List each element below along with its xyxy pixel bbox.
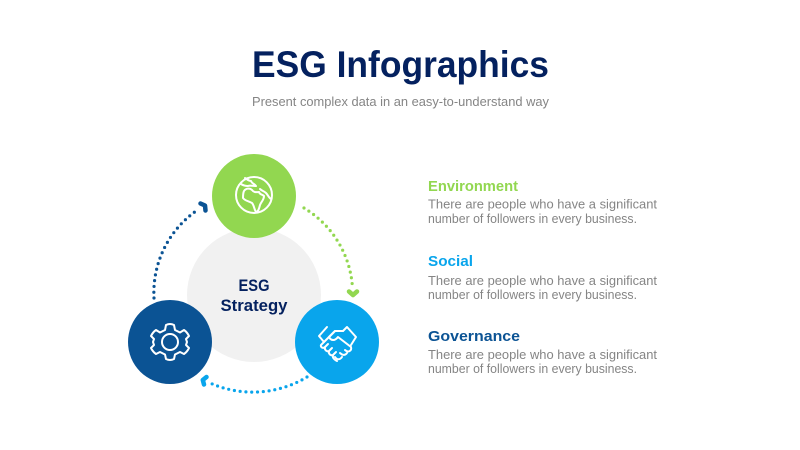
text block: governance: number of followers in every business.	[428, 362, 637, 376]
text block: environment: number of followers in every business.	[428, 212, 637, 226]
text block: social: number of followers in every business.	[428, 288, 637, 302]
environment node	[212, 154, 296, 238]
text block: governance: There are people who have a significant	[428, 348, 658, 362]
arrow: governance to environment	[154, 204, 206, 298]
arrow: environment to social	[304, 208, 357, 295]
center circle: ESG Strategy	[187, 228, 321, 362]
text block: environment: There are people who have a significant	[428, 198, 658, 212]
social node	[295, 300, 379, 384]
text block: governance: Governance	[428, 328, 520, 345]
icon: handshake	[319, 327, 356, 361]
governance node	[128, 300, 212, 384]
text block: social: Social	[428, 253, 473, 270]
arrow: social to governance	[203, 377, 307, 392]
icon: gear	[151, 324, 189, 360]
text block: social	[428, 253, 658, 302]
center circle: ESG Strategy: ESG	[238, 276, 270, 295]
text block: governance	[428, 328, 658, 376]
title: ESG Infographics	[252, 44, 549, 85]
icon: globe	[236, 177, 272, 213]
cycle diagram	[128, 154, 379, 392]
subtitle: Present complex data in an easy-to-understand way	[252, 94, 549, 109]
text block: environment	[428, 178, 658, 226]
center circle: ESG Strategy: Strategy	[220, 296, 288, 315]
text block: environment: Environment	[428, 178, 518, 195]
text block: social: There are people who have a significant	[428, 274, 658, 288]
